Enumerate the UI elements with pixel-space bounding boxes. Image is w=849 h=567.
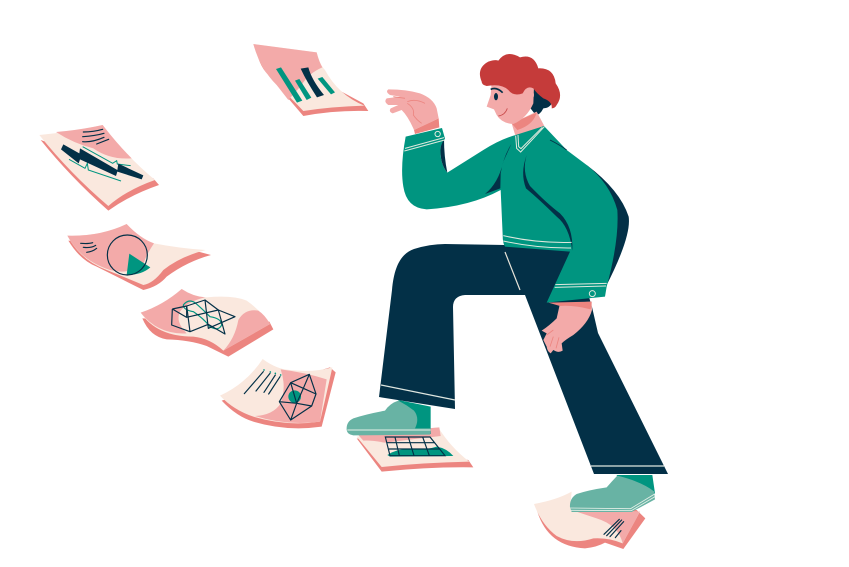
document: cube (220, 359, 336, 428)
sweater (402, 126, 618, 303)
hair (480, 54, 560, 108)
collar (516, 127, 544, 152)
armpit shadow (485, 144, 511, 194)
lower hand (542, 302, 592, 353)
document: table under left foot (357, 427, 473, 472)
hair bun (527, 87, 553, 115)
face (487, 82, 534, 124)
eye and brow (491, 89, 507, 116)
sweater back shadow (587, 165, 629, 288)
raised hand (385, 89, 439, 130)
left foot and shoe (347, 400, 431, 435)
head and raised arm (385, 54, 629, 303)
shoulder crease (550, 140, 567, 150)
left cuff (404, 131, 445, 151)
document: under right foot (534, 492, 645, 549)
hem stripes (503, 236, 572, 248)
wrist band (414, 118, 439, 134)
sleeve shadow (440, 139, 447, 173)
document: wireframe shape (141, 289, 273, 357)
document: lightning line chart (39, 125, 159, 211)
right foot and shoe (570, 475, 655, 512)
palm creases (393, 97, 425, 123)
document: pie chart (67, 224, 211, 290)
arm fold line (523, 155, 572, 251)
trousers (379, 244, 668, 474)
neck (512, 112, 544, 140)
right cuff (555, 283, 607, 297)
ear (523, 89, 534, 101)
document: bar chart (253, 44, 368, 116)
